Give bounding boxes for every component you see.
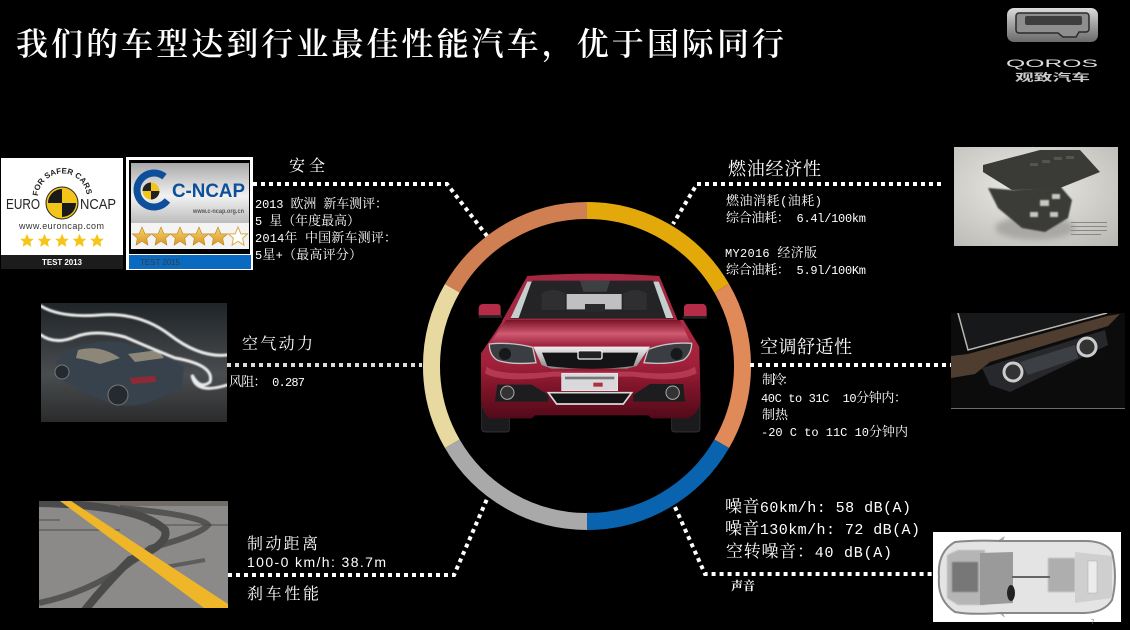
panel: safety text: 2013 欧洲 新车测评：: [255, 197, 388, 212]
panel: fuel economy text: 综合油耗： 5.9l/100Km: [726, 262, 866, 278]
logo: Qoros: [1006, 8, 1098, 84]
panel: air conditioning text: 空调舒适性: [760, 337, 852, 359]
badge: C-NCAP: TEST 2015: [140, 258, 181, 267]
photo: skid marks on road: [39, 501, 228, 610]
badge: Euro NCAP: NCAP: [80, 196, 116, 213]
panel: braking text: 刹车性能: [247, 585, 319, 604]
panel: braking text: [247, 535, 386, 604]
bumper highlight: [485, 367, 697, 379]
panel: fuel economy text: 燃油消耗(油耗): [726, 193, 822, 209]
panel: air conditioning text: -20 C to 11C 10分钟内: [761, 424, 908, 440]
title: 我们的车型达到行业最佳性能汽车，优于国际同行: [16, 19, 784, 65]
logo: Qoros: QOROS: [1006, 58, 1098, 70]
fog lamps: [495, 384, 685, 402]
badge: [578, 351, 602, 359]
connector: noise: [675, 507, 933, 574]
connector: braking: [228, 499, 487, 575]
tires: [482, 400, 700, 432]
panel: aerodynamics text: 空气动力: [242, 335, 313, 354]
panel: fuel economy text: [725, 159, 866, 278]
badge: Euro NCAP: www.euroncap.com: [18, 221, 104, 231]
panel: noise text: 噪音60km/h: 58 dB(A): [725, 497, 911, 518]
badge: C-NCAP: C-NCAP: [172, 181, 245, 202]
logo: Qoros: 观致汽车: [1015, 71, 1090, 84]
body: [481, 320, 701, 418]
badge: C-NCAP: [126, 157, 253, 270]
panel: braking text: 100-0 km/h: 38.7m: [247, 554, 386, 570]
panel: safety text: [255, 157, 397, 263]
car front view: [479, 274, 707, 432]
badge: Euro NCAP: EURO: [6, 196, 40, 213]
connector: air conditioning: [750, 363, 951, 367]
connector: fuel economy: [673, 184, 941, 224]
roof and pillars: [502, 274, 678, 322]
badge: Euro NCAP: FOR SAFER CARS: [32, 168, 92, 196]
lower intake: [548, 393, 632, 404]
panel: fuel economy text: 综合油耗： 6.4l/100km: [726, 210, 866, 226]
panel: safety text: 安全: [289, 157, 325, 176]
mirrors: [479, 304, 707, 319]
photo: climate controls: [951, 313, 1125, 410]
windshield: [511, 281, 674, 319]
badge: Euro NCAP: [1, 158, 123, 269]
panel: safety text: 2014年 中国新车测评：: [255, 230, 397, 246]
panel: aerodynamics text: [229, 335, 313, 390]
panel: air conditioning text: [760, 337, 908, 440]
panel: noise text: 空转噪音：40 dB(A): [726, 542, 892, 563]
panel: aerodynamics text: 风阻： 0.287: [229, 375, 305, 390]
panel: fuel economy text: 燃油经济性: [728, 159, 821, 181]
panel: air conditioning text: 制冷：: [762, 372, 795, 388]
photo: car underbody: [933, 532, 1121, 622]
panel: air conditioning text: 40C to 31C 10分钟内：: [761, 390, 907, 406]
panel: noise text: [725, 497, 920, 594]
connector: aerodynamics: [227, 363, 422, 367]
panel: fuel economy text: MY2016 经济版: [725, 245, 817, 261]
headlights: [489, 343, 536, 363]
hood: [488, 320, 692, 345]
photo: car with airflow: [41, 303, 227, 422]
panel: air conditioning text: 制热: [762, 407, 789, 423]
panel: noise text: 声音: [731, 578, 755, 594]
panel: noise text: 噪音130km/h: 72 dB(A): [725, 519, 920, 540]
connector: safety: [253, 184, 487, 236]
panel: safety text: 5 星（年度最高）: [255, 213, 360, 229]
panel: braking text: 制动距离: [247, 535, 318, 554]
upper grille: [533, 347, 650, 369]
donut ring: [431, 210, 743, 522]
panel: safety text: 5星+（最高评分）: [255, 247, 362, 263]
photo: engine: [954, 147, 1118, 246]
badge: Euro NCAP: TEST 2013: [42, 258, 83, 267]
badge: C-NCAP: www.c-ncap.org.cn: [192, 208, 244, 215]
page number: 7: [1091, 620, 1095, 626]
licence plate: [562, 373, 618, 391]
